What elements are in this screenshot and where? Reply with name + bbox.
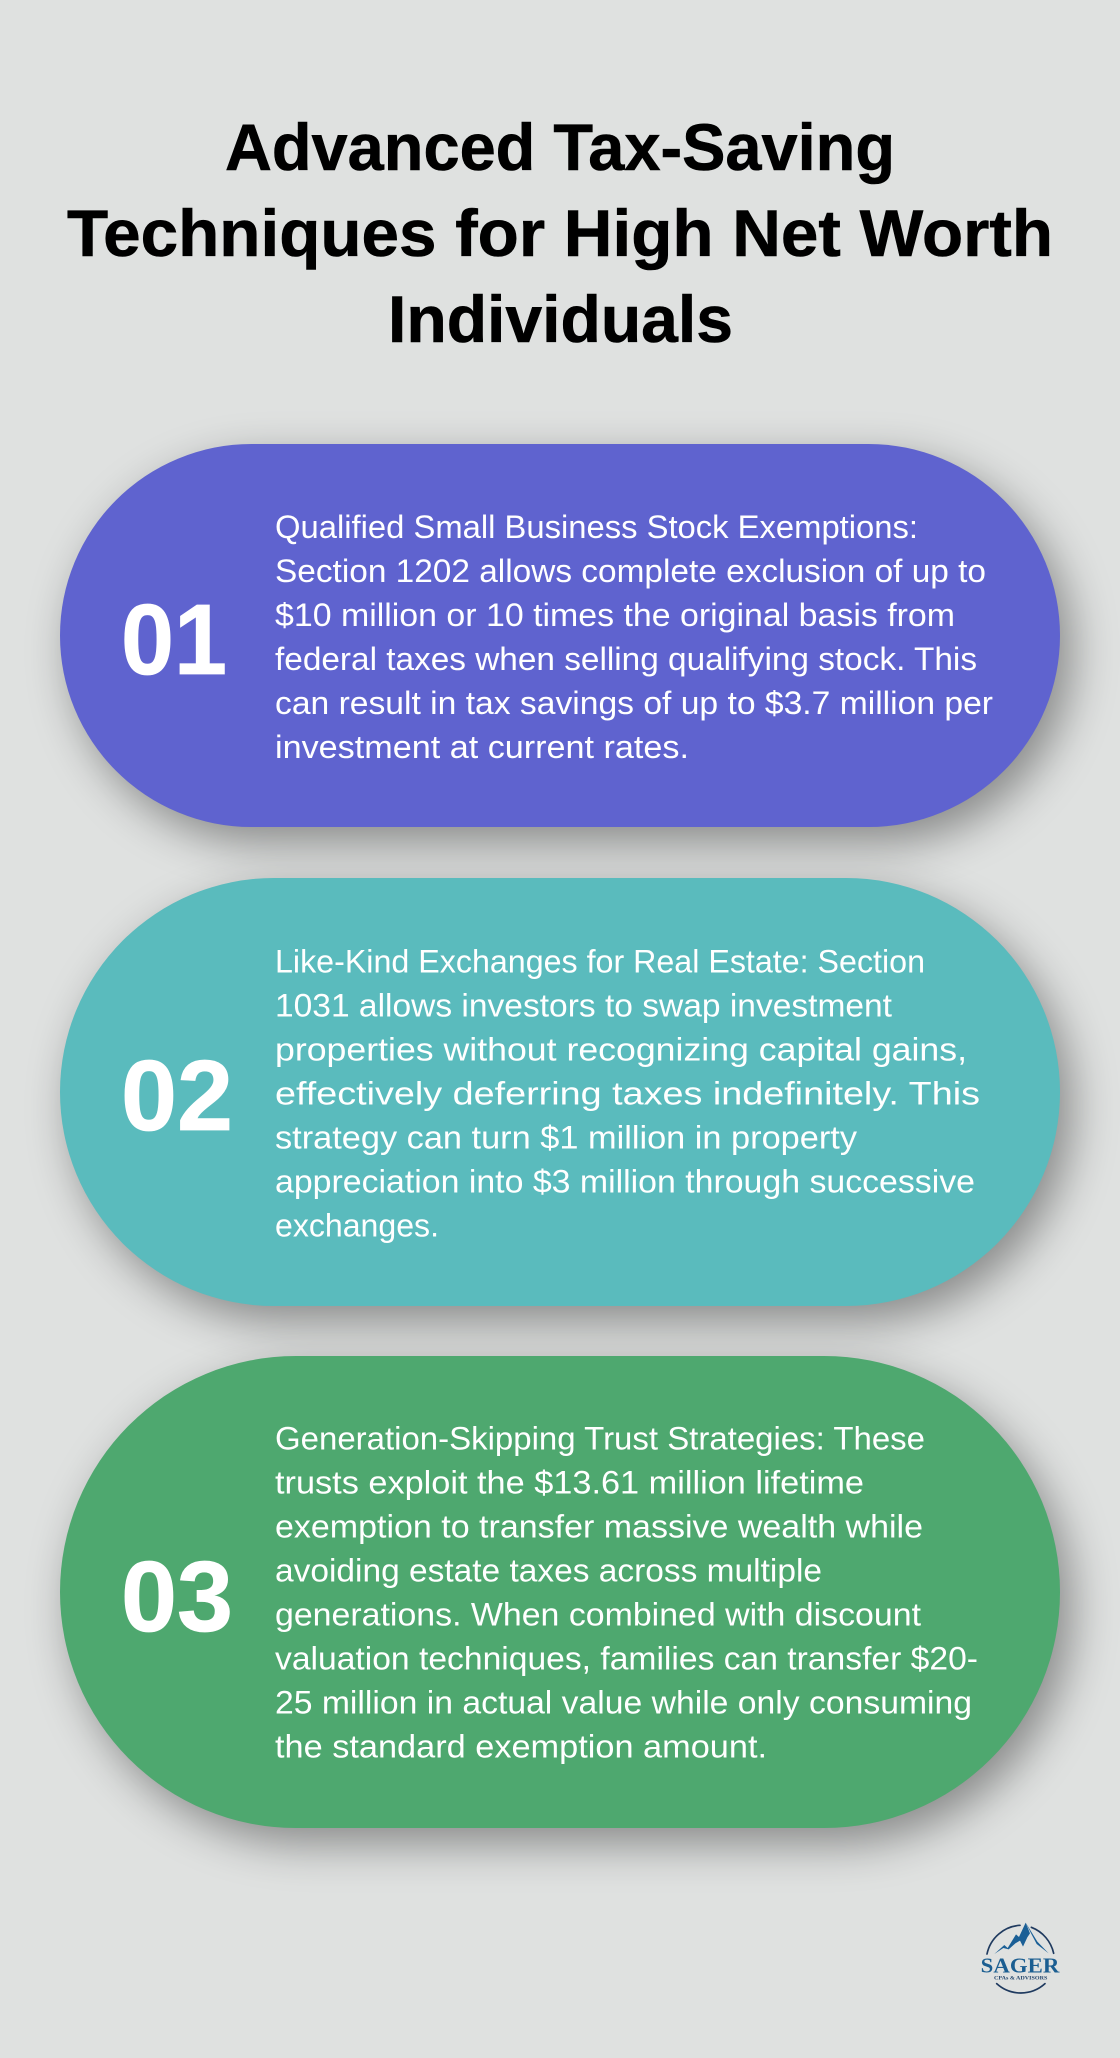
text block 03: 25 million in actual value while only consuming	[275, 1684, 972, 1720]
text block 02: strategy can turn $1 million in property	[275, 1120, 857, 1156]
text block 02: Like-Kind Exchanges for Real Estate: Section	[275, 944, 925, 980]
panel: 01 qualified small business stock	[60, 444, 1060, 827]
logo wordmark: SAGER	[981, 1955, 1061, 1977]
logo: Sager CPAs & Advisors	[981, 1922, 1061, 1994]
title	[67, 110, 1053, 356]
text block 02: effectively deferring taxes indefinitely. This	[275, 1076, 980, 1112]
title: Advanced Tax-Saving	[225, 110, 895, 184]
text block 02: properties without recognizing capital gains,	[275, 1032, 967, 1068]
text block 03: exemption to transfer massive wealth while	[275, 1508, 923, 1544]
number 01: 01	[121, 584, 227, 696]
text block 01: federal taxes when selling qualifying stock. This	[275, 641, 977, 677]
number 03: 03	[121, 1541, 233, 1653]
logo tagline: CPAs & ADVISORS	[994, 1976, 1048, 1981]
text block 01	[275, 509, 993, 765]
text block 02: exchanges.	[275, 1208, 439, 1244]
text block 03: the standard exemption amount.	[275, 1728, 767, 1764]
text block 02	[275, 944, 980, 1244]
text block 03: Generation-Skipping Trust Strategies: These	[275, 1420, 925, 1456]
logo ring	[987, 1925, 1054, 1993]
text block 03	[275, 1420, 978, 1764]
title: Individuals	[388, 282, 733, 356]
text block 03: generations. When combined with discount	[275, 1596, 921, 1632]
text block 03: valuation techniques, families can transfer $20-	[275, 1640, 978, 1676]
text block 02: 1031 allows investors to swap investment	[275, 988, 892, 1024]
text block 01: can result in tax savings of up to $3.7 million per	[275, 685, 993, 721]
text block 01: Qualified Small Business Stock Exemptions:	[275, 509, 918, 545]
text block 01: $10 million or 10 times the original basis from	[275, 597, 955, 633]
text block 02: appreciation into $3 million through successive	[275, 1164, 975, 1200]
number 02: 02	[121, 1040, 233, 1152]
text block 03: trusts exploit the $13.61 million lifetime	[275, 1464, 864, 1500]
title: Techniques for High Net Worth	[67, 196, 1053, 270]
panel: 02 like-kind exchanges	[60, 878, 1060, 1306]
logo mountain	[994, 1923, 1049, 1954]
text block 01: investment at current rates.	[275, 729, 689, 765]
text block 01: Section 1202 allows complete exclusion of up to	[275, 553, 986, 589]
panel: 03 generation-skipping trusts	[60, 1356, 1060, 1828]
text block 03: avoiding estate taxes across multiple	[275, 1552, 822, 1588]
